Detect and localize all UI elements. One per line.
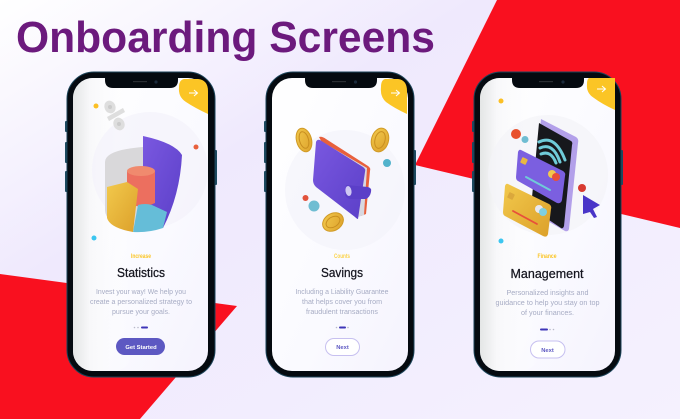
decorative dots: [92, 104, 198, 240]
purple card: [516, 150, 565, 203]
wallet pages: [319, 140, 367, 217]
icon: next arrow corner: [381, 79, 407, 114]
icon: next arrow corner: [179, 79, 208, 114]
body text: [296, 289, 389, 316]
body text: Personalized insights and: [506, 290, 589, 297]
icon: percent: [102, 99, 127, 132]
phone frame: [264, 72, 416, 377]
phone: savings: [264, 72, 416, 377]
body text: [90, 289, 192, 316]
wallet back and orange lining: [319, 137, 370, 216]
body text: [496, 290, 600, 317]
decorative dots: [302, 159, 391, 212]
body text: fraudulent transactions: [306, 309, 379, 316]
yellow card: [503, 184, 551, 237]
title: Onboarding Screens: [16, 13, 435, 62]
label: finance: Finance: [538, 254, 557, 260]
wallet strap: [345, 185, 371, 199]
body text: guidance to help you stay on top: [496, 300, 600, 307]
wallet front: [313, 140, 365, 219]
body text: Including a Liability Guarantee: [296, 289, 389, 296]
label: increase: Increase: [131, 254, 152, 260]
body text: that helps cover you from: [302, 299, 382, 306]
icon: cursor: [583, 195, 600, 218]
button: next: Next: [336, 345, 349, 351]
chart: 3D cylinder: [105, 136, 182, 232]
phone frame: [472, 72, 623, 377]
button: get started: [116, 338, 165, 355]
icon: payment phone with cards: [503, 119, 578, 237]
body text: create a personalized strategy to: [90, 299, 192, 306]
label: counts: Counts: [334, 254, 351, 260]
body text: Invest your way! We help you: [96, 289, 186, 296]
wifi arcs: [539, 140, 565, 163]
wallet button: [345, 186, 352, 196]
body text: of your finances.: [521, 310, 574, 317]
button: next: [326, 338, 360, 356]
pagination dots: [540, 328, 554, 330]
pagination dots: [336, 326, 349, 328]
icon: wallet: [313, 137, 371, 219]
phone: management: [472, 72, 623, 377]
heading: statistics: Statistics: [117, 266, 165, 280]
heading: management: Management: [510, 267, 584, 281]
pagination dots: [134, 326, 148, 328]
button: next: Next: [541, 348, 554, 354]
phone: statistics: [65, 72, 217, 377]
decorative dots: [498, 98, 586, 244]
body text: pursue your goals.: [112, 309, 170, 316]
icon: coins: [294, 126, 391, 235]
button: next: [530, 341, 565, 358]
heading: savings: Savings: [321, 266, 363, 280]
phone frame: [65, 72, 217, 377]
icon: next arrow corner: [587, 78, 615, 110]
button: get started: Get Started: [125, 345, 157, 351]
